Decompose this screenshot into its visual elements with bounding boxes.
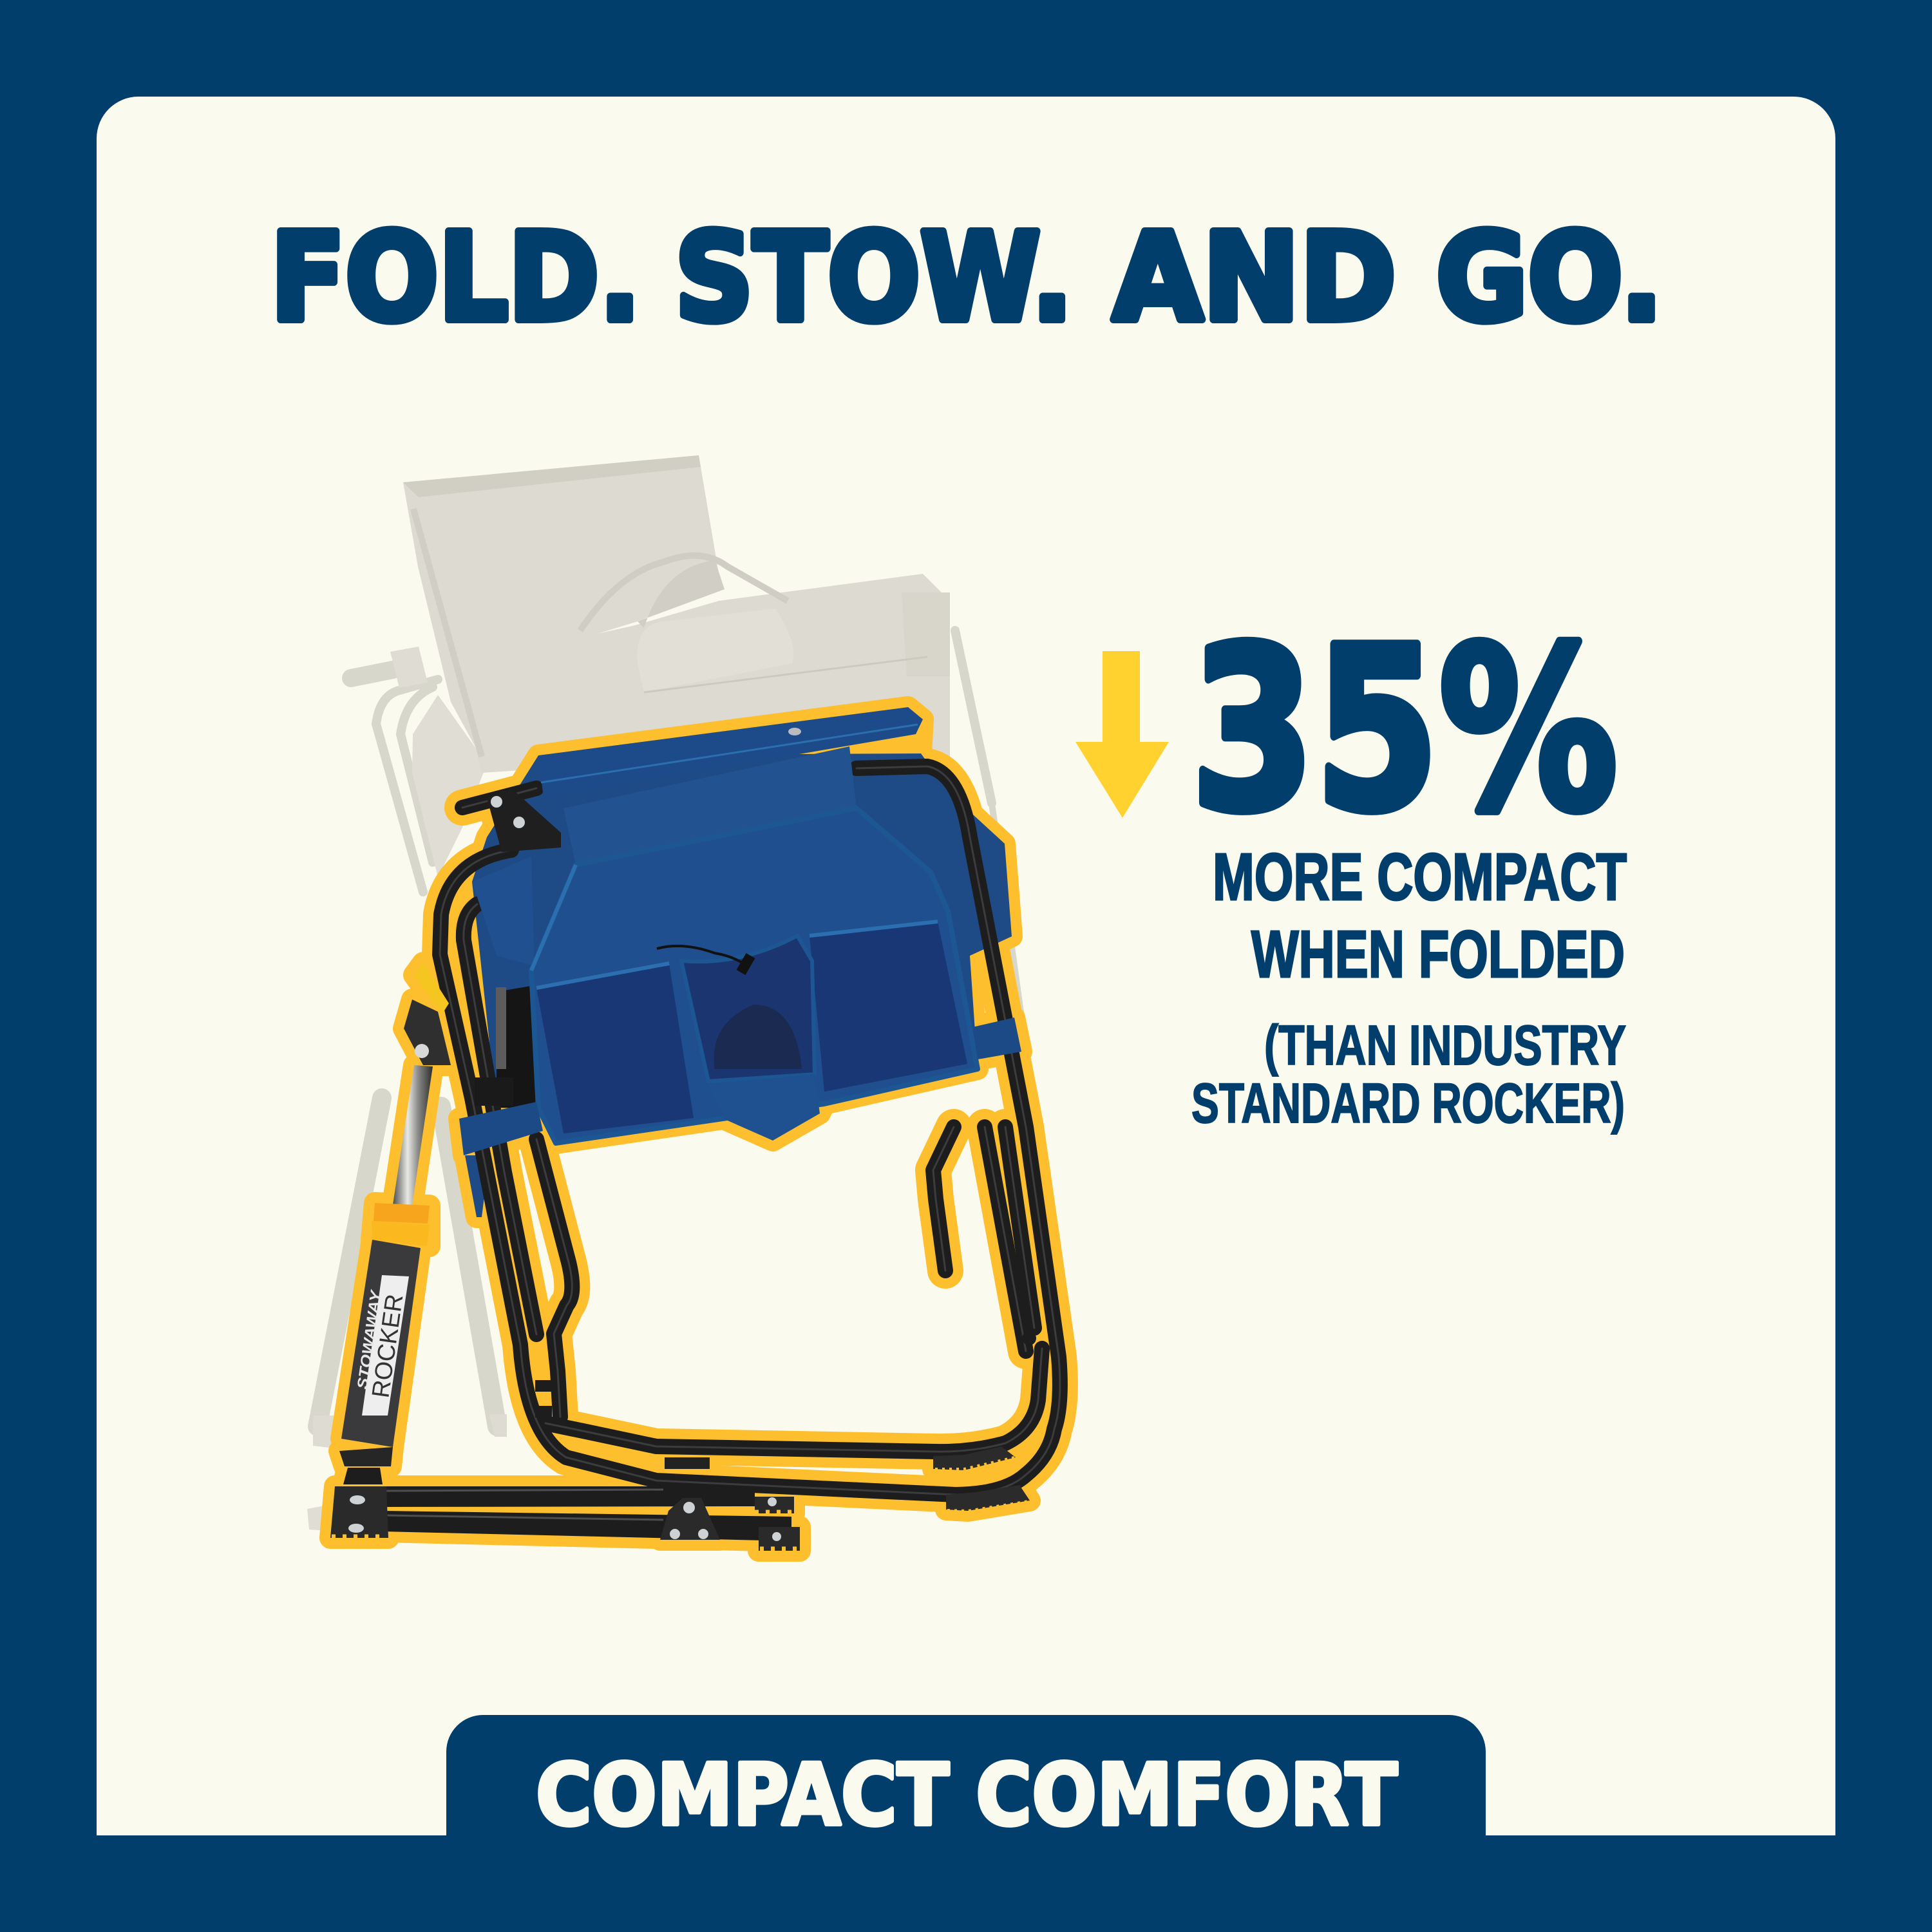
stat description: WHEN FOLDED bbox=[1251, 917, 1625, 991]
back of seat bag bbox=[465, 753, 1012, 1217]
chair frame tubes bbox=[440, 766, 1060, 1495]
top bracket bbox=[487, 788, 561, 852]
tab label: COMPACT COMFORT bbox=[536, 1746, 1397, 1845]
rocker base bbox=[330, 1457, 800, 1551]
title: GO. bbox=[1436, 207, 1663, 348]
gas strut with label bbox=[339, 1065, 433, 1484]
title: FOLD. bbox=[270, 207, 641, 348]
stat footnote bbox=[1191, 1014, 1626, 1135]
side mechanism bbox=[404, 963, 513, 1106]
stat footnote: (THAN INDUSTRY bbox=[1264, 1014, 1626, 1077]
yellow outline around folded chair bbox=[330, 707, 1060, 1551]
title bbox=[270, 207, 1663, 348]
gas strut with label: ROCKER bbox=[367, 1293, 408, 1399]
title: AND bbox=[1113, 207, 1396, 348]
stat description: MORE COMPACT bbox=[1213, 840, 1627, 914]
bottom tab bbox=[446, 1715, 1486, 1835]
folded chair bbox=[330, 707, 1060, 1551]
ghost chair: unfolded industry standard rocker bbox=[307, 455, 1046, 1531]
big stat: 35%: 35% bbox=[1191, 600, 1618, 861]
rubber foot caps bbox=[933, 1446, 1030, 1511]
stat footnote: STANDARD ROCKER) bbox=[1191, 1072, 1625, 1135]
title: STOW. bbox=[675, 207, 1073, 348]
gas strut with label: STOWAWAY bbox=[354, 1288, 384, 1390]
icon: down arrow bbox=[1075, 651, 1169, 818]
seat bag front bbox=[459, 707, 1021, 1155]
frame pivot brackets bbox=[535, 1331, 1036, 1417]
stat description bbox=[1213, 840, 1627, 991]
